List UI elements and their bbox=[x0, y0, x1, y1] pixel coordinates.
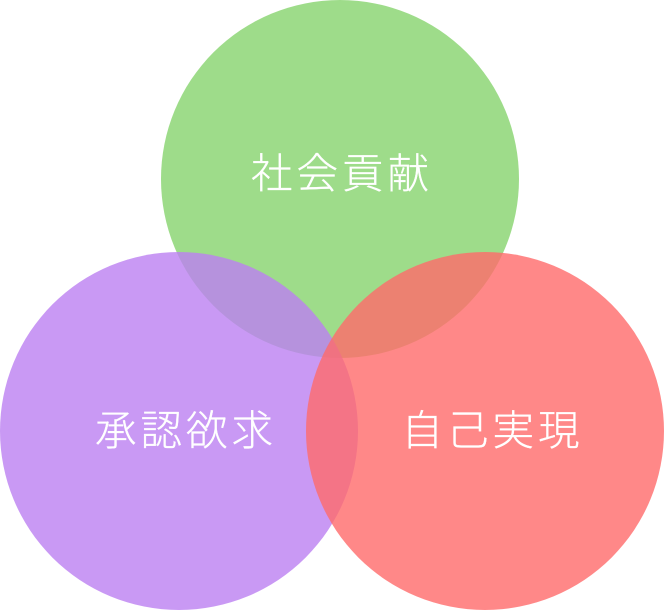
circle: social contribution bbox=[161, 0, 519, 358]
circle: self-actualization bbox=[306, 252, 664, 610]
label: self-actualization: 自己実現 bbox=[401, 407, 584, 454]
label: social contribution: 社会貢献 bbox=[251, 150, 433, 197]
circle: recognition need bbox=[0, 252, 358, 610]
label: recognition need: 承認欲求 bbox=[95, 407, 277, 454]
